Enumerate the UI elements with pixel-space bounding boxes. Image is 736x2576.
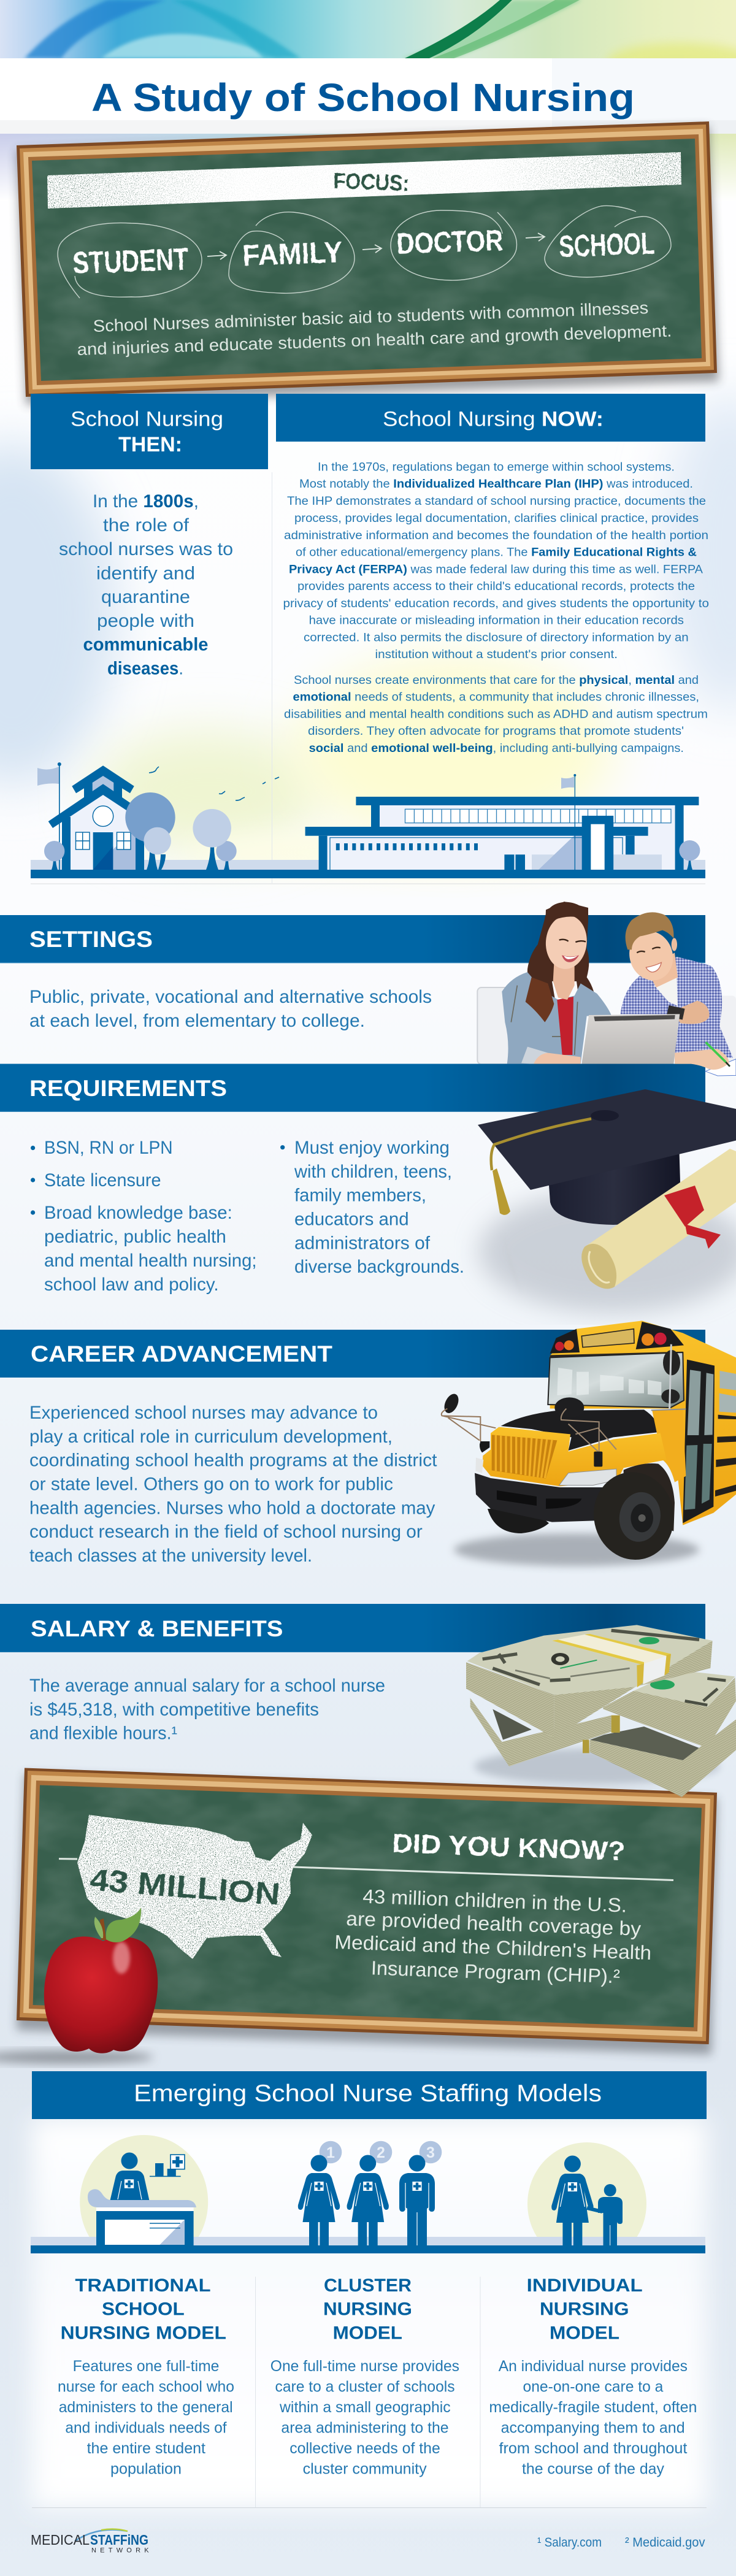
title band [0, 58, 736, 134]
text: requirements left bullets: pediatric, public health [44, 1227, 226, 1247]
photo: red apple [0, 1907, 158, 2064]
heading: traditional model: NURSING MODEL [61, 2323, 226, 2343]
panel: now header [276, 394, 705, 442]
text: individual model: from school and throughout [499, 2440, 687, 2457]
text: cluster model: within a small geographic [279, 2399, 451, 2416]
text: career advancement: health agencies. Nurses who hold a doctorate may [29, 1498, 435, 1518]
text: career advancement: or state level. Others go on to work for public [29, 1474, 393, 1494]
text: requirements left bullets: school law and policy. [44, 1275, 219, 1295]
text: requirements right bullet: family members, [294, 1186, 426, 1206]
column: traditional school nursing model [58, 2275, 234, 2478]
heading: individual model: MODEL [550, 2323, 619, 2343]
section header: settings: SETTINGS [29, 927, 153, 952]
heading: cluster model: NURSING [323, 2299, 412, 2319]
text: coverage fact: 43 million children in the U.S. [362, 1885, 627, 1917]
sky background behind then and now [0, 393, 736, 877]
panel: then header: School Nursing [71, 408, 223, 431]
text: then description: school nurses was to [59, 539, 233, 559]
text: individual model: the course of the day [522, 2461, 664, 2478]
text: cluster model: One full-time nurse provides [270, 2358, 459, 2375]
section header: emerging staffing models [32, 2071, 707, 2119]
text: now description: In the 1970s, regulations began to emerge within school systems. [318, 461, 675, 474]
section header: career advancement: CAREER ADVANCEMENT [31, 1341, 332, 1367]
chalkboard: did you know [17, 1768, 717, 2055]
panel: then header: THEN: [118, 433, 182, 456]
text: then description: diseases. [107, 659, 183, 679]
logo: medical staffing network: MEDICAL [31, 2532, 90, 2548]
text: individual model: accompanying them to and [501, 2420, 685, 2437]
photo: students with tablet [477, 902, 736, 1064]
text: requirements left bullets: Broad knowledge base: [44, 1203, 232, 1223]
text: individual model: medically-fragile student, often [489, 2399, 697, 2416]
heading: individual model [527, 2275, 643, 2343]
panel: then header [31, 394, 268, 469]
text: cluster model: care to a cluster of schools [275, 2379, 455, 2396]
word: student: STUDENT [72, 242, 189, 280]
text: traditional model [58, 2358, 234, 2478]
text: requirements right bullet: with children, teens, [294, 1162, 452, 1182]
map of the united states [77, 1815, 312, 1959]
text: now description: emotional needs of students, a community that includes chronic illnesses, [293, 690, 699, 703]
focus description: and injuries and educate students on health care and growth development. [77, 321, 672, 359]
text: salary: The average annual salary for a school nurse [29, 1676, 385, 1696]
text: traditional model: administers to the general [59, 2399, 233, 2416]
text: salary [29, 1676, 385, 1744]
text: traditional model: nurse for each school who [58, 2379, 234, 2396]
section header: requirements [0, 1064, 705, 1112]
text: now description: administrative information and becomes the foundation of the health portion [284, 529, 708, 542]
heading: individual model: INDIVIDUAL [527, 2275, 643, 2296]
illustration: old schoolhouse [37, 762, 158, 870]
icon: traditional model nurse at bed [88, 2153, 196, 2245]
dividers between models [32, 2277, 707, 2508]
text: cluster model: collective needs of the [289, 2440, 440, 2457]
text: now description: disorders. They often advocate for programs that promote students' [308, 724, 684, 738]
section header: salary and benefits: SALARY & BENEFITS [31, 1616, 283, 1641]
text: then description: identify and [96, 563, 195, 584]
text: settings: at each level, from elementary to college. [29, 1011, 365, 1031]
text: individual model: one-on-one care to a [523, 2379, 663, 2396]
text: now description: Privacy Act (FERPA) was made federal law during this time as well. FERPA [289, 562, 703, 576]
focus label: FOCUS: [333, 168, 410, 196]
text: cluster model: cluster community [303, 2461, 427, 2478]
text: coverage fact: Medicaid and the Children's Health [334, 1931, 652, 1964]
illustration: staffing ground strip [31, 2237, 705, 2253]
icon: cluster model three nurses: 1 [326, 2144, 335, 2161]
text: career advancement: play a critical role in curriculum development, [29, 1427, 393, 1447]
text: now description: of other educational/emergency plans. The Family Educational Rights & [296, 545, 697, 559]
chalkboard: focus [17, 121, 719, 405]
focus description [77, 298, 672, 359]
text: settings: Public, private, vocational and alternative schools [29, 987, 432, 1007]
text: requirements left bullets: State licensure [44, 1170, 161, 1190]
text: career advancement [29, 1403, 437, 1566]
text: now description: disabilities and mental health conditions such as ADHD and autism spectrum [284, 708, 708, 721]
text: traditional model: population [110, 2461, 182, 2478]
text: requirements right bullet: educators and [294, 1209, 409, 1229]
text: cluster model [270, 2358, 459, 2478]
text: now description: privacy of students' education records, and gives students the opportunity to [283, 597, 709, 610]
illustration: trees by schoolhouse [44, 792, 237, 870]
photo: school bus [442, 1321, 736, 1567]
title: A Study of School Nursing [91, 75, 635, 120]
text: now description: School nurses create environments that care for the physical, mental and [294, 673, 699, 687]
text: career advancement: Experienced school nurses may advance to [29, 1403, 378, 1423]
text: individual model: An individual nurse provides [499, 2358, 688, 2375]
circled words [58, 205, 671, 298]
icon: individual model nurse and child [551, 2155, 623, 2246]
heading: traditional model [61, 2275, 226, 2343]
section header: emerging staffing models: Emerging School Nurse Staffing Models [134, 2080, 602, 2107]
icon: cluster model three nurses: 3 [426, 2144, 435, 2161]
logo: medical staffing network: NETWORK [91, 2547, 149, 2554]
heading: cluster model: MODEL [333, 2323, 402, 2343]
text: salary: is $45,318, with competitive benefits [29, 1700, 319, 1720]
chalk lines [59, 1859, 673, 1880]
text: now description: process, provides legal documentation, clarifies clinical practice, provides [294, 512, 699, 525]
text: now description: provides parents access to their child's educational records, protects the [297, 580, 695, 593]
photo: stacks of money [466, 1625, 736, 1797]
photo detail: hand, pen and notepad [675, 1042, 736, 1076]
text: requirements left bullets [31, 1138, 257, 1295]
section header: career advancement [0, 1330, 705, 1378]
label: 43 million: 43 MILLION [88, 1862, 282, 1912]
text: requirements left bullets: and mental health nursing; [44, 1251, 257, 1271]
icon: cluster model three nurses: 2 [377, 2144, 385, 2161]
text: coverage fact: Insurance Program (CHIP).² [370, 1957, 621, 1987]
text: then description: quarantine [101, 587, 190, 607]
text: coverage fact: are provided health coverage by [346, 1907, 642, 1940]
arrows between words [207, 233, 545, 259]
text: requirements right bullet: administrators of [294, 1233, 431, 1253]
text: requirements right bullet [280, 1138, 464, 1277]
heading: did you know: DID YOU KNOW? [392, 1828, 626, 1866]
footnotes: sources: ¹ Salary.com [537, 2536, 602, 2550]
text: coverage fact [334, 1885, 652, 1987]
text: now description: social and emotional well-being , including anti-bullying campaigns. [309, 742, 684, 755]
text: now description: corrected. It also permits the disclosure of directory information by an [304, 631, 689, 645]
heading: traditional model: SCHOOL [102, 2299, 185, 2319]
section header: salary and benefits [0, 1604, 705, 1652]
text: traditional model: the entire student [87, 2440, 205, 2457]
text: then description [59, 491, 233, 679]
text: then description: people with [97, 611, 194, 631]
icon: cluster model three nurses [298, 2141, 442, 2245]
heading: individual model: NURSING [540, 2299, 629, 2319]
heading: cluster model [323, 2275, 412, 2343]
text: then description: In the 1800s, [93, 491, 199, 512]
illustration: ground strip [31, 860, 705, 884]
text: career advancement: teach classes at the university level. [29, 1546, 312, 1566]
focus chalk strip [47, 152, 681, 209]
illustration: birds [149, 767, 279, 800]
panel: staffing models background [32, 2119, 707, 2507]
faded colour strip below the title [0, 134, 736, 201]
text: now description: The IHP demonstrates a standard of school nursing practice, documents the [287, 494, 706, 508]
illustration backdrop: yellow circles [80, 2135, 646, 2269]
text: settings [29, 987, 432, 1031]
text: now description: have inaccurate or misleading information in their education records [309, 613, 684, 627]
photo: graduation cap and diploma [478, 1089, 736, 1313]
text: requirements right bullet: diverse backgrounds. [294, 1257, 464, 1277]
text: cluster model: area administering to the [281, 2420, 449, 2437]
text: career advancement: conduct research in the field of school nursing or [29, 1522, 423, 1542]
text: traditional model: and individuals needs of [65, 2420, 227, 2437]
logo: medical staffing network [31, 2529, 149, 2554]
text: then description: communicable [83, 634, 209, 654]
text: traditional model: Features one full-time [73, 2358, 219, 2375]
top colour banner [0, 0, 736, 58]
heading: cluster model: CLUSTER [324, 2275, 412, 2296]
logo: medical staffing network: STAFFiNG [90, 2532, 148, 2548]
text: requirements right bullet: Must enjoy working [294, 1138, 450, 1158]
section header: settings [0, 915, 705, 963]
text: individual model [489, 2358, 697, 2478]
text: then description: the role of [103, 515, 190, 535]
text: salary: and flexible hours.¹ [29, 1723, 177, 1744]
word: school: SCHOOL [558, 226, 655, 264]
illustration: modern school [305, 774, 700, 870]
column: individual nursing model [489, 2275, 697, 2478]
focus description: School Nurses administer basic aid to students with common illnesses [93, 298, 649, 335]
text: requirements left bullets: BSN, RN or LPN [44, 1138, 173, 1158]
footnotes: sources [537, 2536, 705, 2550]
heading: traditional model: TRADITIONAL [75, 2275, 211, 2296]
text: now description: institution without a student's prior consent. [375, 648, 618, 661]
word: family: FAMILY [242, 236, 343, 272]
text: now description: Most notably the Individualized Healthcare Plan (IHP) was introduced. [299, 477, 693, 491]
word: doctor: DOCTOR [396, 224, 504, 261]
text: career advancement: coordinating school health programs at the district [29, 1451, 437, 1471]
text: now description [283, 461, 709, 755]
footnotes: sources: ² Medicaid.gov [625, 2536, 705, 2550]
column: cluster nursing model [270, 2275, 459, 2478]
panel: now header: School Nursing NOW: [383, 408, 604, 431]
section header: requirements: REQUIREMENTS [29, 1076, 227, 1101]
